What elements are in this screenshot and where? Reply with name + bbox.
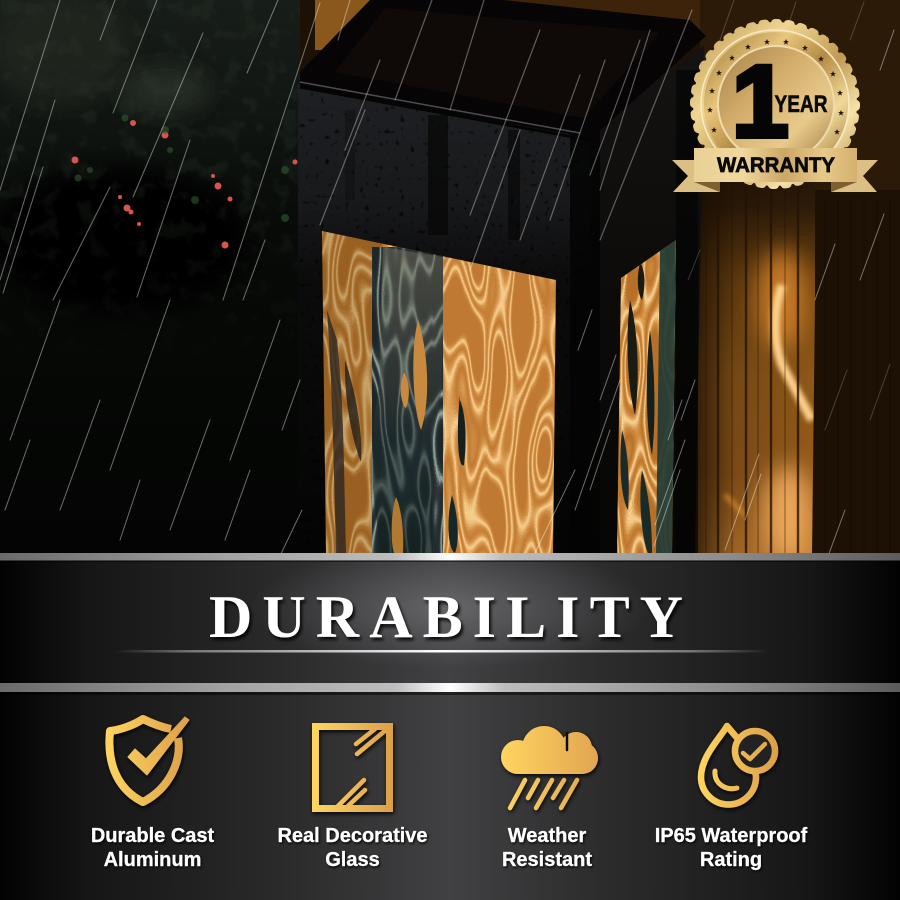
WARRANTY label: WARRANTY (717, 154, 835, 177)
light reflection on wood (706, 207, 815, 553)
lantern body (298, 45, 704, 555)
title panel (0, 553, 900, 692)
label: Aluminum (104, 849, 201, 871)
lantern solar cap (300, 0, 706, 140)
label: Rating (700, 849, 762, 871)
YEAR label: YEAR (774, 91, 828, 118)
numeral 1: 1 (732, 44, 789, 158)
wooden post (300, 0, 900, 565)
stars around the seal (707, 39, 844, 135)
heading: DURABILITY (209, 584, 683, 650)
red flowers (72, 120, 298, 248)
label: Glass (325, 849, 380, 871)
ribbon band (694, 148, 857, 182)
background garden foliage (0, 0, 300, 364)
ribbon tails (672, 160, 878, 192)
seal with scalloped edge (693, 22, 857, 186)
label: Real Decorative (277, 825, 428, 847)
teal streak in glass (327, 247, 466, 553)
features panel (0, 692, 900, 900)
icon: droplet with check (701, 726, 775, 804)
label: Resistant (502, 849, 592, 871)
icon: shield with check (109, 717, 189, 802)
feature: real decorative glass (277, 726, 428, 871)
icon: glass pane (316, 726, 390, 808)
icon: rain cloud (501, 726, 598, 808)
feature: IP65 waterproof rating (655, 726, 808, 871)
label: Weather (508, 825, 586, 847)
decorative glass: side pane (615, 238, 679, 555)
rain streaks (0, 0, 894, 570)
label: IP65 Waterproof (655, 825, 808, 847)
feature: durable cast aluminum (91, 717, 215, 871)
feature: weather resistant (501, 726, 598, 871)
label: Durable Cast (91, 825, 215, 847)
warranty badge (672, 22, 878, 192)
foliage leaves (74, 114, 289, 222)
decorative glass: front pane (320, 230, 560, 555)
photo: lantern in the rain (0, 0, 900, 570)
